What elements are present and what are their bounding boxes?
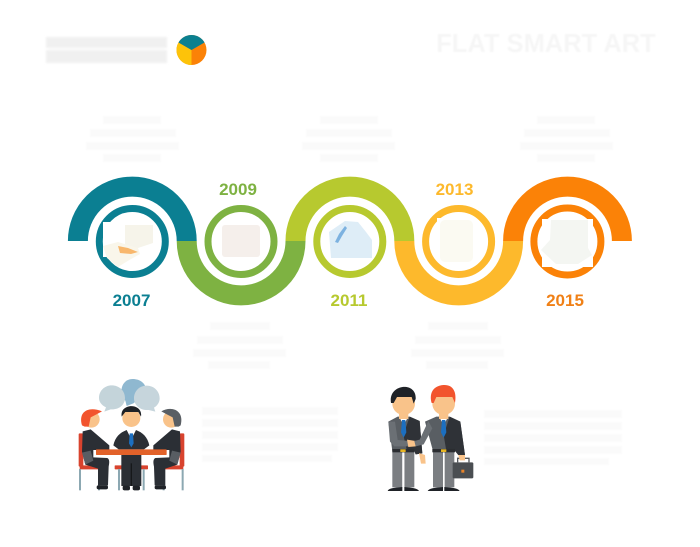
text block: meeting paragraph (illegible) xyxy=(202,407,338,462)
arc: 2009 green xyxy=(187,241,296,295)
icon: tri-colour pie logo xyxy=(176,35,206,65)
milestone 2009: ring and faded image xyxy=(208,208,274,274)
label: 2015: 2015 xyxy=(546,291,584,310)
arc: 2015 orange xyxy=(513,187,622,241)
arc: 2007 teal xyxy=(78,187,187,241)
timeline ribbon xyxy=(78,187,622,295)
right businessman xyxy=(414,385,465,491)
text block: lower caption 2013 (illegible) xyxy=(411,322,504,369)
text block: handshake paragraph (illegible) xyxy=(484,410,622,465)
milestone 2015: ring and faded image xyxy=(534,208,601,275)
right man xyxy=(153,409,181,489)
milestone 2007: ring and faded image xyxy=(99,208,165,274)
text block: top caption 2011 (illegible) xyxy=(302,116,395,162)
right chair xyxy=(163,433,184,490)
illustration: two businessmen shaking hands xyxy=(388,385,473,491)
icon: speech bubbles xyxy=(99,379,160,412)
milestone 2011: ring and faded image xyxy=(317,208,383,274)
left businessman xyxy=(388,387,426,491)
left chair xyxy=(79,433,100,490)
heading: flat smart art: FLAT SMART ART xyxy=(436,30,656,58)
illustration: business meeting at table xyxy=(79,379,184,490)
text block: top caption 2007 (illegible) xyxy=(86,116,179,162)
arc: 2013 yellow xyxy=(404,241,513,295)
icon: briefcase xyxy=(453,455,473,478)
label: 2007: 2007 xyxy=(113,291,150,310)
meeting table xyxy=(96,449,167,455)
text block: lower caption 2009 (illegible) xyxy=(193,322,286,369)
label: 2009: 2009 xyxy=(219,180,257,199)
centre stool xyxy=(115,465,148,490)
text block: top caption 2015 (illegible) xyxy=(520,116,613,162)
left man xyxy=(81,409,109,489)
header smudge: illegible left title xyxy=(46,37,167,63)
centre man xyxy=(113,406,149,490)
arc: 2011 lime xyxy=(296,187,404,241)
label: 2011: 2011 xyxy=(331,291,367,310)
milestone 2013: ring and faded image xyxy=(426,208,492,274)
label: 2013: 2013 xyxy=(436,180,473,199)
